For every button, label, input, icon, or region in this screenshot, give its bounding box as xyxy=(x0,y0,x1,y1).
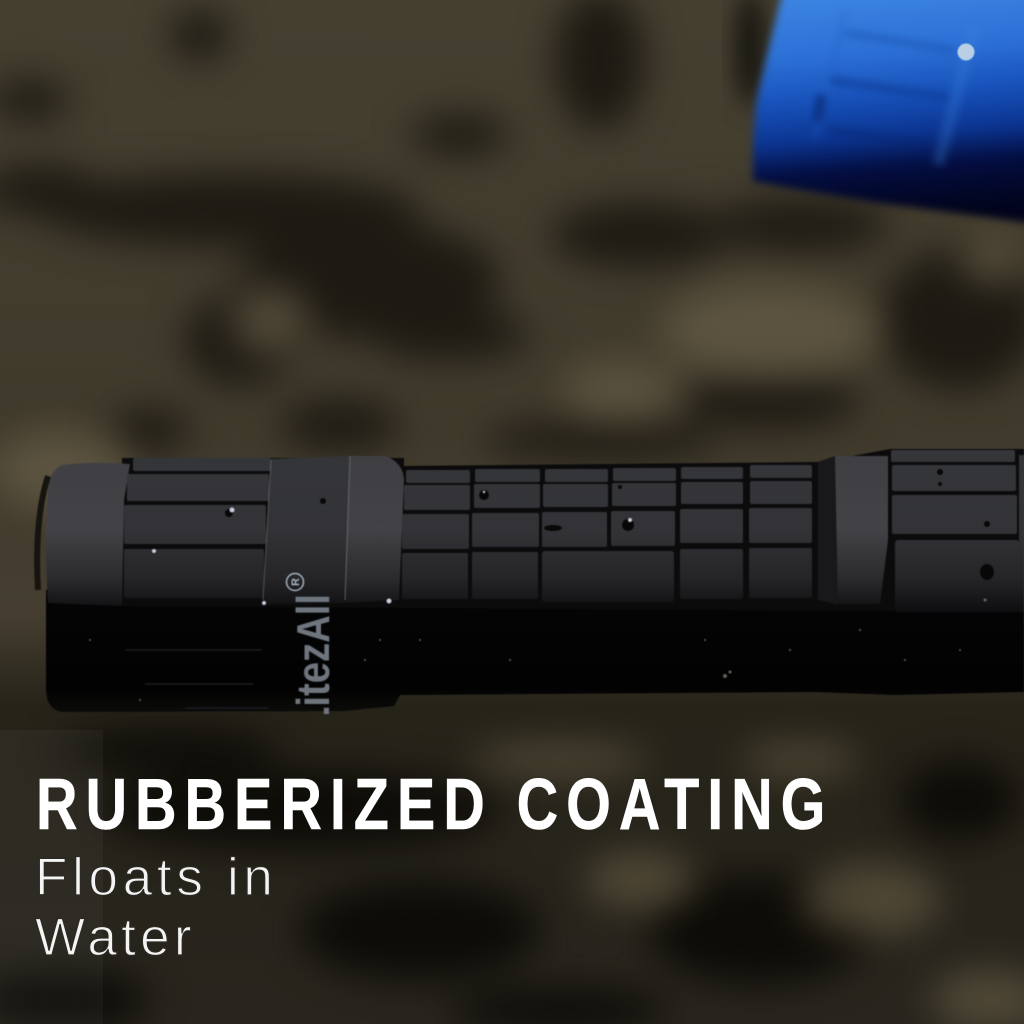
faint reflected grooves in lower half xyxy=(125,650,268,708)
lower reflective black half xyxy=(46,590,1024,712)
bezel ring xyxy=(263,456,350,604)
left grip blocks xyxy=(124,458,271,598)
water droplets xyxy=(225,469,994,580)
headline: RUBBERIZED COATING xyxy=(36,764,833,844)
lens cap end xyxy=(46,463,130,606)
speckles on black half xyxy=(89,598,986,701)
registered mark xyxy=(286,574,304,590)
black flashlight xyxy=(37,449,1024,730)
registered mark: R xyxy=(290,578,302,586)
tail grip blocks xyxy=(891,450,1024,612)
subheading xyxy=(35,848,278,967)
logo text: LitezAll xyxy=(287,594,339,730)
blue flashlight, out of focus xyxy=(736,0,1024,224)
subheading: Water xyxy=(35,908,196,967)
subheading: Floats in xyxy=(35,848,278,907)
tail collar xyxy=(818,456,888,604)
middle grip blocks xyxy=(402,465,812,602)
glint on blue flashlight xyxy=(958,44,974,60)
dark upper backing xyxy=(122,449,1024,612)
